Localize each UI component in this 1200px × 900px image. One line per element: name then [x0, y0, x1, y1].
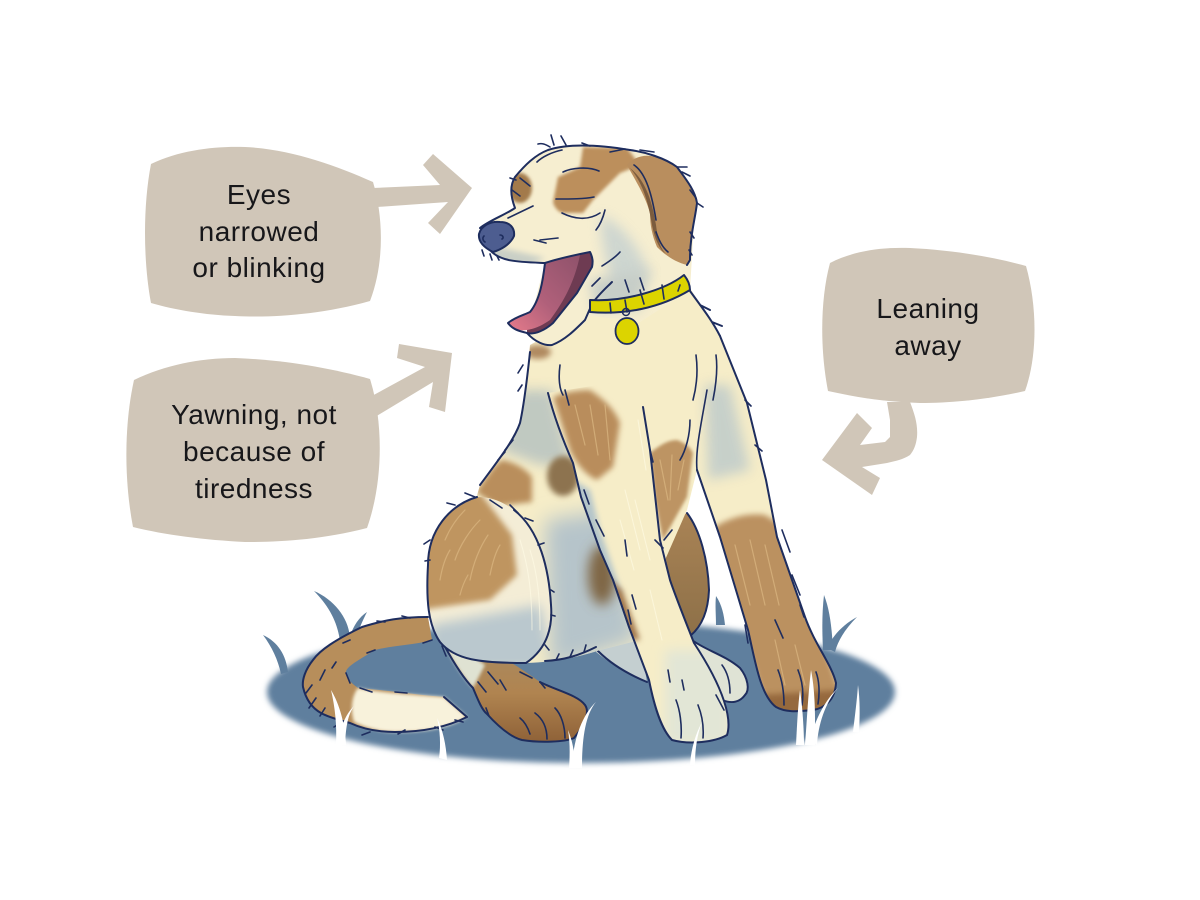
callout: leaning away: Leaning: [876, 293, 980, 324]
tail: [303, 616, 467, 735]
arrow: to eyes: [373, 154, 472, 234]
collar: [590, 275, 690, 313]
head: [479, 135, 695, 346]
callout: eyes narrowed or blinking: or blinking: [192, 252, 326, 283]
back paw: [690, 640, 748, 702]
far hind thigh: [662, 513, 709, 636]
callout: eyes narrowed or blinking: Eyes: [227, 179, 291, 210]
ground shadow: [267, 621, 895, 763]
open mouth: [508, 252, 593, 333]
callout: yawning, not because of tiredness: [126, 358, 380, 542]
nose: [479, 222, 514, 260]
neck right edge: [690, 291, 722, 336]
far belly and hind foot: [596, 623, 647, 682]
haunch: [420, 490, 555, 670]
callout: leaning away: [822, 248, 1034, 403]
right front leg: [680, 336, 850, 720]
callout: yawning, not because of tiredness: because of: [183, 436, 325, 467]
callout: leaning away: away: [894, 330, 962, 361]
arrow: leaning away: [822, 402, 917, 495]
closed eye: [510, 168, 600, 218]
collar tag: [616, 308, 638, 344]
arrow: to mouth: [370, 344, 452, 417]
callout: yawning, not because of tiredness: Yawning, not: [171, 399, 337, 430]
ear: [627, 150, 703, 265]
tongue: [508, 255, 580, 330]
infographic: dog body language: [126, 134, 1034, 768]
left front leg: [548, 365, 730, 745]
torso: [470, 288, 722, 670]
grass in front: [331, 670, 860, 768]
lower jaw: [527, 282, 612, 345]
grass behind the dog: [263, 591, 857, 674]
callout: eyes narrowed or blinking: narrowed: [199, 216, 319, 247]
near hind foot: [444, 645, 587, 742]
callout: eyes narrowed or blinking: [145, 147, 381, 317]
illustration: yawning dog on grass: [263, 135, 895, 768]
callout: yawning, not because of tiredness: tiredness: [195, 473, 313, 504]
